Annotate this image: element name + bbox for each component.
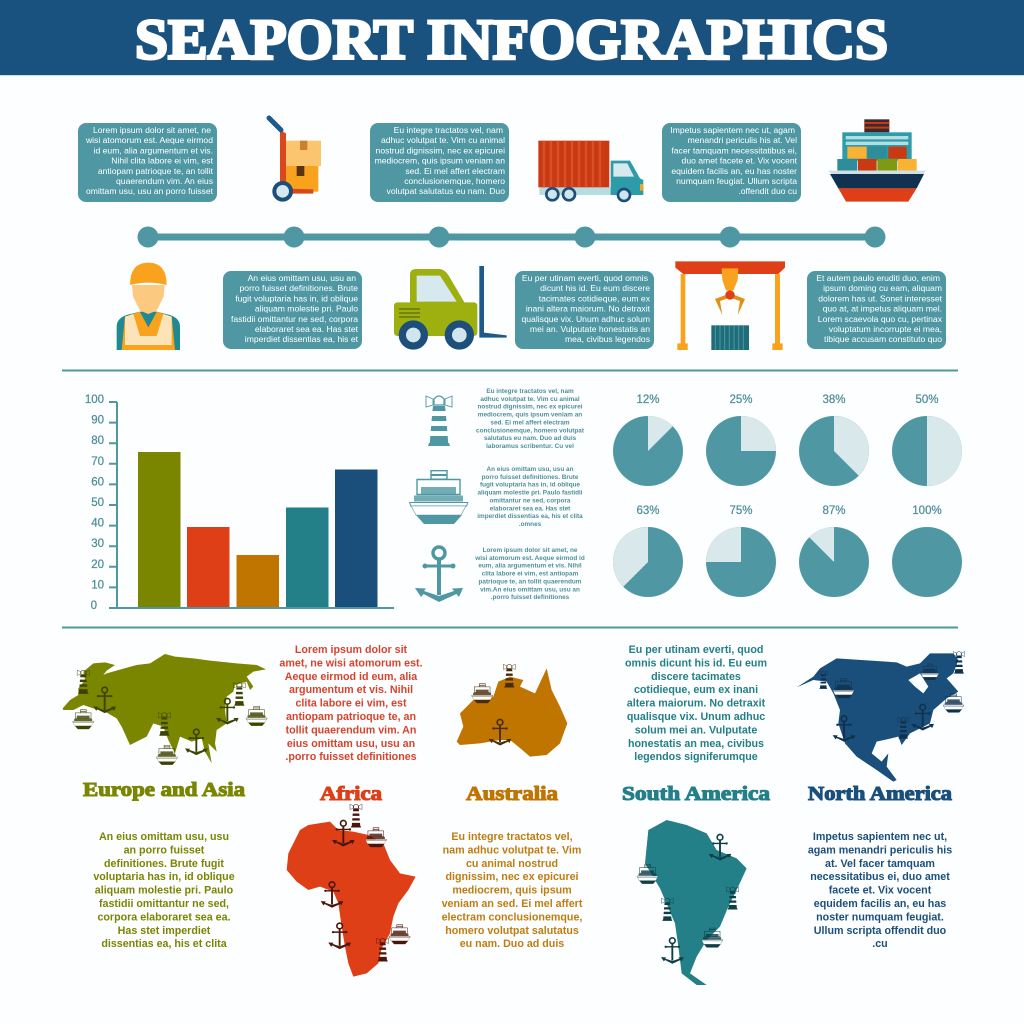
red description: .porro fuisset definitiones: [285, 751, 417, 763]
map: Europe and Asia: [63, 654, 267, 765]
anchor description: eum, alia argumentum et vis. Nihil: [478, 563, 582, 570]
text box 4: [223, 271, 362, 349]
icon: container truck: [538, 141, 643, 201]
green description: dissentias ea, his et clita: [101, 938, 228, 950]
text box 1: Nihil clita labore ei vim, est: [111, 156, 214, 166]
heading: Australia: Australia: [466, 783, 558, 805]
pie 75%: 75%: [729, 505, 753, 517]
text box 6: Et autem paulo eruditi duo, enim: [816, 273, 940, 283]
navy description: .cu: [872, 938, 888, 950]
text box 2: nostrud dignissim, nec ex epicurei: [376, 145, 505, 155]
text box 2: volutpat salutatus eu nam. Duo: [387, 186, 505, 196]
lighthouse description: mediocrem, quis ipsum veniam an: [478, 412, 582, 419]
text box 4: An eius omittam usu, usu an: [248, 273, 356, 283]
south america description: omnis dicunt his id. Eu eum: [625, 657, 767, 669]
text box 4: fastidii omittantur ne sed, corpora: [231, 314, 358, 324]
bar chart: [85, 394, 394, 612]
heading: South America: South America: [622, 783, 770, 805]
pie 12%: 12%: [636, 394, 660, 406]
text box 1: id eum, alia argumentum et vis.: [94, 145, 213, 155]
text box 3: equidem facilis an, eu has noster: [671, 166, 797, 176]
map: Africa: [287, 804, 416, 977]
navy description: equidem facilis an, eu has: [814, 898, 946, 910]
navy description: Impetus sapientem nec ut,: [813, 831, 947, 843]
south america description: altera maiorum. No detraxit: [627, 698, 766, 710]
icon: hand cart with boxes: [269, 118, 321, 200]
orange description: cu animal nostrud: [466, 858, 558, 870]
text box 3: facer tamquam necessitatibus ei,: [671, 145, 797, 155]
pie 12%: [613, 394, 683, 486]
south america description: qualisque vix. Unum adhuc: [627, 711, 765, 723]
ship description: porro fuisset definitiones. Brute: [482, 474, 579, 481]
y axis labels: 60: [91, 476, 104, 488]
y axis labels: 50: [91, 497, 104, 509]
text box 2: adhuc volutpat te. Vim cu animal: [381, 135, 505, 145]
red description: Aeque eirmod id eum, alia: [285, 671, 418, 683]
text box 2: sed. Ei mel affert electram: [405, 166, 505, 176]
icon: forklift: [394, 266, 507, 346]
text box 4: porro fuisset definitiones. Brute: [240, 283, 358, 293]
lighthouse description: adhuc volutpat te. Vim cu animal: [480, 396, 580, 403]
orange description: homero volutpat salutatus: [445, 925, 579, 937]
south america description: cotidieque, eum ex inani: [634, 684, 758, 696]
south america description: Eu per utinam everti, quod: [629, 644, 763, 656]
green description: Has stet imperdiet: [118, 925, 211, 937]
pie 87%: [799, 505, 869, 597]
pie 50%: [892, 394, 962, 486]
heading: North America: North America: [808, 783, 952, 805]
red description: clita labore ei vim, est: [295, 698, 407, 710]
y axis labels: 40: [91, 518, 104, 530]
text box 4: elaboraret sea ea. Has stet: [255, 324, 359, 334]
anchor description: patrioque te, an tollit quaerendum: [479, 578, 582, 585]
text box 5: [515, 271, 654, 349]
pie 63%: 63%: [636, 505, 660, 517]
lighthouse description: Eu integre tractatos vel, nam: [486, 388, 574, 395]
y axis labels: 0: [91, 600, 97, 612]
ship description: imperdiet dissentias ea, his et clita: [477, 513, 583, 520]
text box 6: voluptatum incorrupte ei mea,: [829, 324, 942, 334]
anchor description: clita labore ei vim, est antiopam: [482, 571, 579, 578]
icon: port worker: [117, 263, 180, 350]
ship description: omittantur ne sed, corpora: [490, 497, 571, 504]
text box 5: qualisque vix. Unum adhuc solum: [522, 314, 650, 324]
red description: argumentum et vis. Nihil: [289, 684, 413, 696]
text box 5: dicunt his id. Eu eum discere: [540, 283, 650, 293]
ship description: An eius omittam usu, usu an: [486, 466, 574, 473]
y axis labels: 70: [91, 456, 104, 468]
navy description: necessitatibus ei, duo amet: [810, 871, 950, 883]
lighthouse description: nostrud dignissim, nec ex epicurei: [477, 404, 583, 411]
green description: aliquam molestie pri. Paulo: [95, 885, 234, 897]
south america description: discere tacimates: [651, 671, 741, 683]
icon: gantry crane: [675, 261, 785, 350]
y axis labels: 20: [91, 559, 104, 571]
ship description: aliquam molestie pri. Paulo fastidii: [477, 490, 583, 497]
text box 3: .offendit duo cu: [738, 186, 797, 196]
navy description: noster numquam feugiat.: [816, 911, 944, 923]
text box 2: Eu integre tractatos vel, nam: [394, 125, 503, 135]
y axis labels: [85, 394, 104, 612]
pie 87%: 87%: [822, 505, 846, 517]
y axis labels: 10: [91, 579, 104, 591]
ship description: elaboraret sea ea. Has stet: [490, 505, 571, 512]
south america description: honestatis an mea, civibus: [628, 738, 764, 750]
y axis labels: 80: [91, 435, 104, 447]
text box 3: menandri periculis his at. Vel: [688, 135, 797, 145]
heading: Africa: Africa: [320, 783, 382, 805]
icon: container ship: [828, 119, 926, 202]
text box 5: mea, civibus legendos: [565, 334, 650, 344]
map: North America: [797, 652, 965, 782]
green description: An eius omittam usu, usu: [99, 831, 229, 843]
text box 3: numquam feugiat. Ullum scripta: [676, 176, 797, 186]
pie 38%: 38%: [822, 394, 846, 406]
text box 3: Impetus sapientem nec ut, agam: [670, 125, 795, 135]
pie 100%: [892, 505, 962, 597]
pie 63%: [613, 505, 683, 597]
map: Australia: [457, 664, 567, 757]
green description: voluptaria has in, id oblique: [93, 871, 235, 883]
pie 25%: [706, 394, 776, 486]
icon: lighthouse: [426, 396, 452, 446]
text box 4: aliquam molestie pri. Paulo: [255, 304, 358, 314]
anchor description: .porro fuisset definitiones: [491, 594, 570, 601]
text box 1: [78, 123, 217, 202]
south america description: legendos signiferumque: [634, 751, 758, 763]
text box 4: imperdiet dissentias ea, his et: [245, 334, 359, 344]
pie charts: [613, 394, 962, 597]
green description: definitiones. Brute fugit: [104, 858, 224, 870]
green description: corpora elaboraret sea ea.: [97, 911, 231, 923]
south america description: solum mei an. Vulputate: [635, 724, 757, 736]
map: South America: [637, 820, 747, 985]
red description: amet, ne wisi atomorum est.: [279, 657, 423, 669]
anchor description: wisi atomorum est. Aeque eirmod id: [474, 555, 585, 562]
bars: [138, 452, 378, 607]
text box 5: inani altera maiorum. No detraxit: [526, 304, 651, 314]
text box 6: quo at, at impetus aliquam mel.: [823, 304, 942, 314]
text box 6: tibique accusam constituto quo: [824, 334, 942, 344]
orange description: dignissim, nec ex epicurei: [445, 871, 579, 883]
orange description: veniam an sed. Ei mel affert: [442, 898, 583, 910]
text box 2: conclusionemque, homero: [404, 176, 505, 186]
text box 6: dolorem has ut. Sonet interesset: [818, 293, 943, 303]
orange description: nam adhuc volutpat te. Vim: [443, 844, 581, 856]
lighthouse description: conclusionemque, homero volutpat: [476, 427, 585, 434]
text box 6: ipsum doming cu eam, aliquam: [823, 283, 942, 293]
green description: an porro fuisset: [124, 844, 205, 856]
text box 1: antiopam patrioque te, an tollit: [98, 166, 214, 176]
pie 75%: [706, 505, 776, 597]
text box 2: mediocrem, quis ipsum veniam an: [375, 156, 505, 166]
navy description: facete et. Vix vocent: [829, 885, 932, 897]
red description: antiopam patrioque te, an: [286, 711, 416, 723]
red description: tollit quaerendum vim. An: [286, 724, 416, 736]
pie 50%: 50%: [915, 394, 939, 406]
red description: eius omittam usu, usu an: [287, 738, 415, 750]
orange description: mediocrem, quis ipsum: [452, 885, 572, 897]
pie 38%: [799, 394, 869, 486]
text box 4: fugit voluptaria has in, id oblique: [235, 293, 358, 303]
anchor description: Lorem ipsum dolor sit amet, ne: [483, 547, 578, 554]
text box 6: [807, 271, 946, 349]
orange description: electram conclusionemque,: [442, 911, 582, 923]
orange description: eu nam. Duo ad duis: [460, 938, 564, 950]
text box 1: omittam usu, usu an porro fuisset: [86, 186, 214, 196]
icon: ship: [410, 471, 468, 524]
text box 5: tacimates cotidieque, eum ex: [539, 293, 651, 303]
lighthouse description: laboramus scribentur. Cu vel: [486, 443, 574, 450]
heading: Europe and Asia: Europe and Asia: [83, 779, 245, 801]
anchor description: vim.An eius omittam usu, usu an: [480, 586, 580, 593]
y axis labels: 30: [91, 538, 104, 550]
text box 3: [662, 123, 801, 202]
lighthouse description: sed. Ei mel affert electram: [490, 419, 570, 426]
pie 100%: 100%: [912, 505, 942, 517]
icon: anchor: [415, 547, 463, 602]
pie 25%: 25%: [729, 394, 753, 406]
ship description: fugit voluptaria has in, id oblique: [480, 482, 581, 489]
timeline: [138, 226, 886, 248]
title: SEAPORT INFOGRAPHICS: [135, 8, 888, 72]
header banner: [0, 0, 1024, 76]
navy description: agam menandri periculis his: [808, 844, 952, 856]
navy description: at. Vel facer tamquam: [825, 858, 935, 870]
y axis labels: 100: [85, 394, 104, 406]
lighthouse description: salutatus eu nam. Duo ad duis: [484, 435, 577, 442]
green description: fastidii omittantur ne sed,: [99, 898, 229, 910]
ship description: .omnes: [519, 521, 542, 528]
text box 6: Lorem scaevola quo cu, pertinax: [818, 314, 943, 324]
text box 3: duo amet facete et. Vix vocent: [682, 156, 798, 166]
text box 5: mei an. Vulputate honestatis an: [530, 324, 650, 334]
red description: Lorem ipsum dolor sit: [295, 644, 408, 656]
text box 1: quaerendum vim. An eius: [116, 176, 213, 186]
text box 2: [370, 123, 509, 202]
text box 5: Eu per utinam everti, quod omnis: [522, 273, 648, 283]
text box 1: wisi atomorum est. Aeque eirmod: [85, 135, 213, 145]
text box 1: Lorem ipsum dolor sit amet, ne: [93, 125, 211, 135]
navy description: Ullum scripta offendit duo: [814, 925, 947, 937]
y axis labels: 90: [91, 415, 104, 427]
orange description: Eu integre tractatos vel,: [451, 831, 573, 843]
